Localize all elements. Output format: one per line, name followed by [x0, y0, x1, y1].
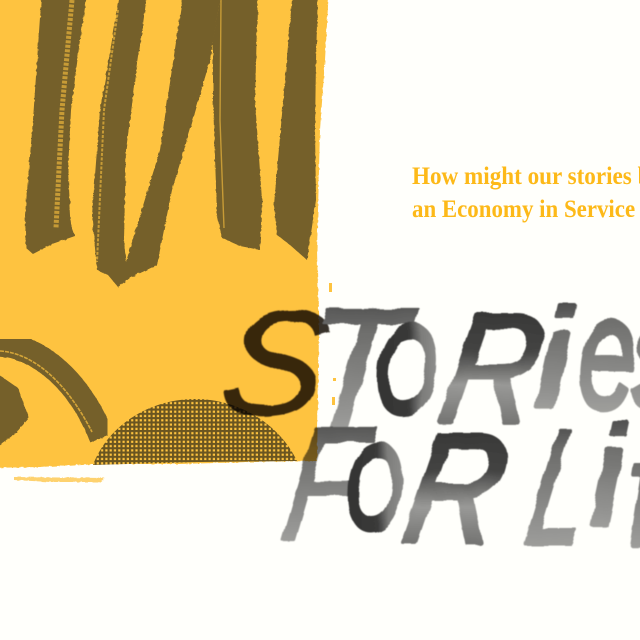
- illustration: brush arc highlight: [0, 351, 92, 432]
- illustration: dry brush highlights: [56, 0, 224, 262]
- fleck 1: [329, 283, 332, 292]
- panel: yellow painted block: [0, 0, 329, 468]
- highlight stroke 3: [220, 0, 224, 228]
- illustration: dark vertical brush strokes: [25, 0, 318, 287]
- letter O second line: O: [346, 422, 402, 553]
- letter O: O: [375, 302, 437, 438]
- paint smear below block: [14, 477, 105, 482]
- letter i second line: i: [590, 397, 627, 555]
- brush stroke 4: [274, 0, 318, 260]
- letter F: F: [274, 393, 382, 574]
- fleck 2: [332, 397, 335, 405]
- letter R second line: R: [393, 402, 519, 575]
- title: brush lettering: [211, 263, 640, 578]
- subtitle: [412, 163, 640, 223]
- fleck 3: [333, 378, 336, 381]
- brush stroke 3: [213, 0, 262, 250]
- highlight stroke 1: [56, 0, 72, 228]
- paint flecks on right edge: [329, 283, 336, 405]
- illustration: brush arc: [0, 344, 102, 438]
- illustration: hatched half circle: [93, 399, 297, 465]
- letter L: L: [516, 396, 606, 578]
- letter S: S: [211, 280, 338, 447]
- illustration: second brush arc: [0, 370, 29, 450]
- brush stroke 2: V shape: [92, 0, 222, 287]
- highlight stroke 2: [97, 10, 118, 262]
- letter e: e: [578, 263, 636, 442]
- letter i: i: [535, 280, 574, 439]
- letter T: T: [294, 272, 424, 465]
- letter R: R: [430, 282, 556, 455]
- brush stroke 1: [25, 0, 88, 254]
